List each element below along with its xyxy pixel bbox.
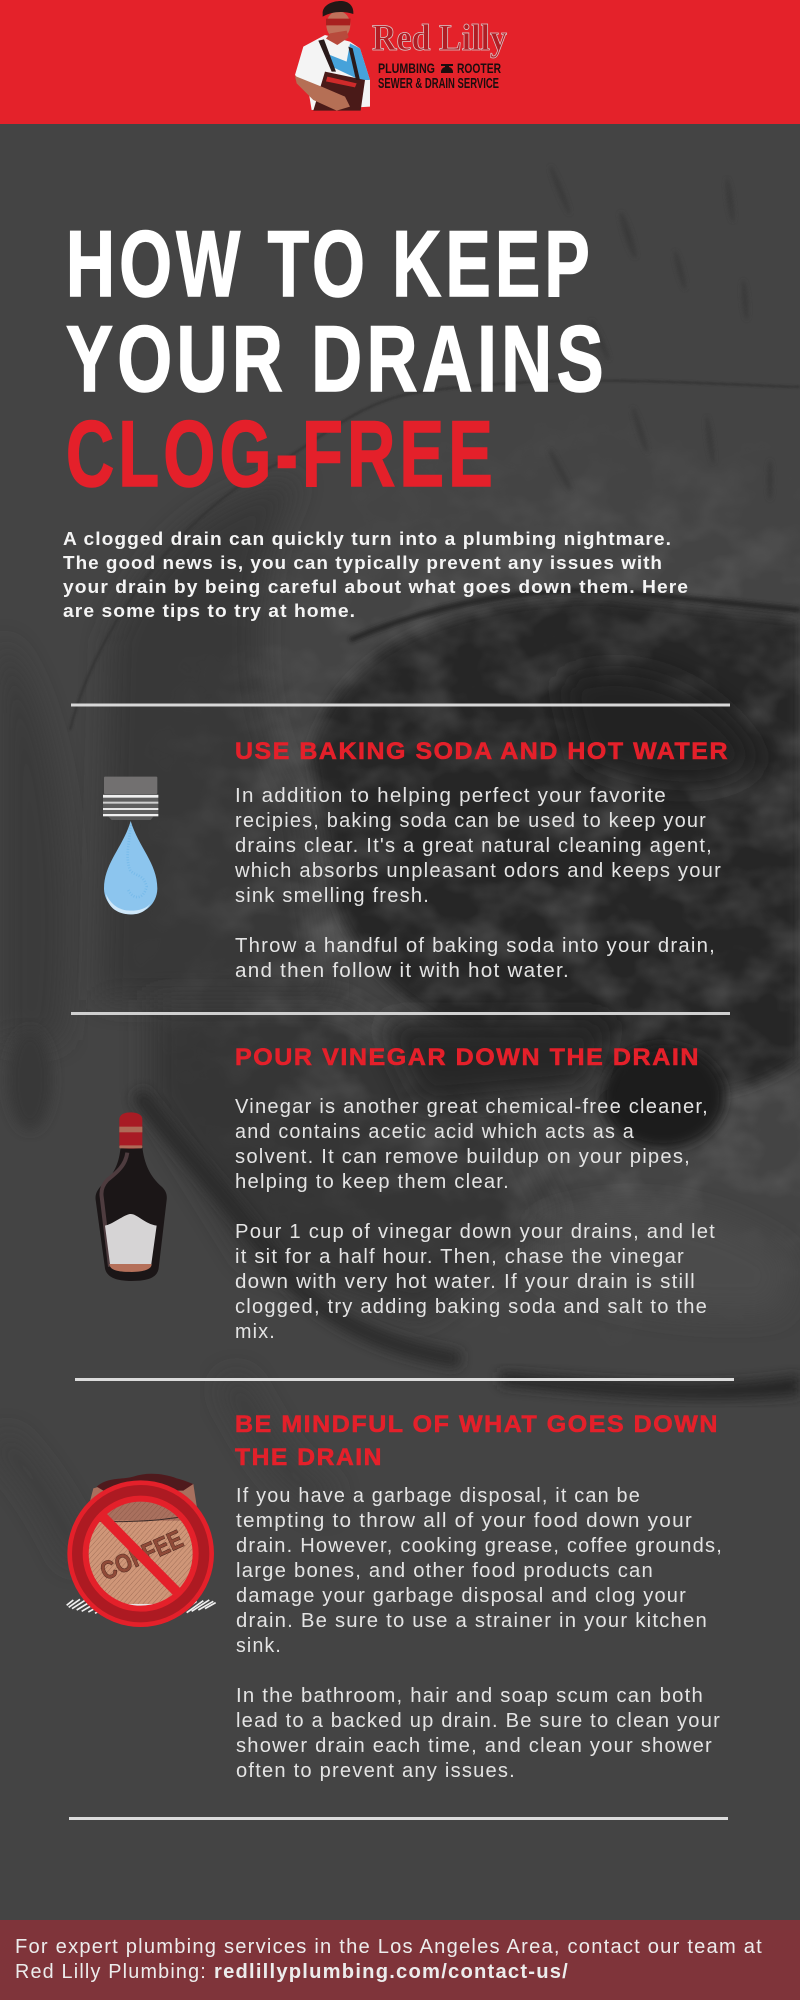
body text: mix. [235,1321,276,1343]
body text: drain. However, cooking grease, coffee grounds, [236,1535,723,1557]
intro text: are some tips to try at home. [63,600,356,621]
intro text: The good news is, you can typically prevent any issues with [63,552,663,573]
icon: shaker and water drop [103,777,158,914]
body text: sink smelling fresh. [235,885,430,907]
title: CLOG-FREE [66,401,497,506]
body text: helping to keep them clear. [235,1171,510,1193]
body text: Pour 1 cup of vinegar down your drains, and let [235,1221,716,1243]
logo line: plumbing and rooter [378,60,501,76]
body text: solvent. It can remove buildup on your pipes, [235,1146,691,1168]
body text [235,1096,716,1343]
heading: POUR VINEGAR DOWN THE DRAIN [235,1044,700,1071]
prohibition bar [100,1514,180,1595]
body text: down with very hot water. If your drain is still [235,1271,696,1293]
logo wordmark: Red Lilly [372,18,507,59]
heading [235,1411,719,1471]
panel: vinegar [95,1044,716,1343]
logo line: sewer and drain: SEWER & DRAIN SERVICE [378,76,499,92]
body text: In the bathroom, hair and soap scum can both [236,1685,704,1707]
body text: In addition to helping perfect your favorite [235,785,667,807]
icon: vinegar bottle [95,1112,167,1281]
prohibition ring [78,1491,203,1616]
coffee bag [83,1481,197,1600]
intro text: your drain by being careful about what goes down them. Here [63,576,689,597]
icon: no coffee sign [67,1474,216,1617]
white scribble shadow [67,1599,216,1613]
body text: it sit for a half hour. Then, chase the vinegar [235,1246,685,1268]
body text: If you have a garbage disposal, it can be [236,1485,641,1507]
body text: drain. Be sure to use a strainer in your kitchen [236,1610,708,1632]
title: HOW TO KEEP [66,211,594,316]
footer call to action [0,1920,800,2000]
footer call to action: Red Lilly Plumbing: [15,1961,207,1983]
heading: BE MINDFUL OF WHAT GOES DOWN [235,1411,719,1438]
logo line: plumbing and rooter: PLUMBING [378,60,435,76]
logo line: plumbing and rooter: ROOTER [457,60,501,76]
intro text [63,528,689,621]
body text: Throw a handful of baking soda into your drain, [235,935,716,957]
heading: USE BAKING SODA AND HOT WATER [235,738,729,765]
body text [234,785,722,982]
body text: often to prevent any issues. [236,1760,516,1782]
logo: Red Lilly Plumbing [295,1,507,111]
intro text: A clogged drain can quickly turn into a plumbing nightmare. [63,528,672,549]
body text: shower drain each time, and clean your shower [236,1735,713,1757]
title [66,211,608,506]
footer call to action: For expert plumbing services in the Los Angeles Area, contact our team at [15,1936,763,1958]
body text: sink. [236,1635,282,1657]
body text: lead to a backed up drain. Be sure to clean your [236,1710,721,1732]
body text: which absorbs unpleasant odors and keeps your [234,860,722,882]
body text: tempting to throw all of your food down your [236,1510,693,1532]
title: YOUR DRAINS [66,306,608,411]
body text: Vinegar is another great chemical-free cleaner, [235,1096,709,1118]
header band [0,0,800,124]
background: textured drain photograph [9,178,800,1403]
panel: baking soda and hot water [103,738,729,982]
body text: and then follow it with hot water. [235,960,570,982]
footer call to action: redlillyplumbing.com/contact-us/ [214,1961,569,1983]
body text: recipies, baking soda can be used to keep your [235,810,707,832]
panel: mindful of what goes down the drain [67,1411,723,1782]
heading: THE DRAIN [235,1444,383,1471]
icon: plumber mascot [295,1,370,111]
body text [236,1485,723,1782]
body text: and contains acetic acid which acts as a [235,1121,635,1143]
body text: large bones, and other food products can [236,1560,654,1582]
body text: drains clear. It's a great natural cleaning agent, [235,835,713,857]
body text: damage your garbage disposal and clog your [236,1585,687,1607]
body text: clogged, try adding baking soda and salt to the [235,1296,708,1318]
coffee label: COFFEE [96,1525,188,1586]
